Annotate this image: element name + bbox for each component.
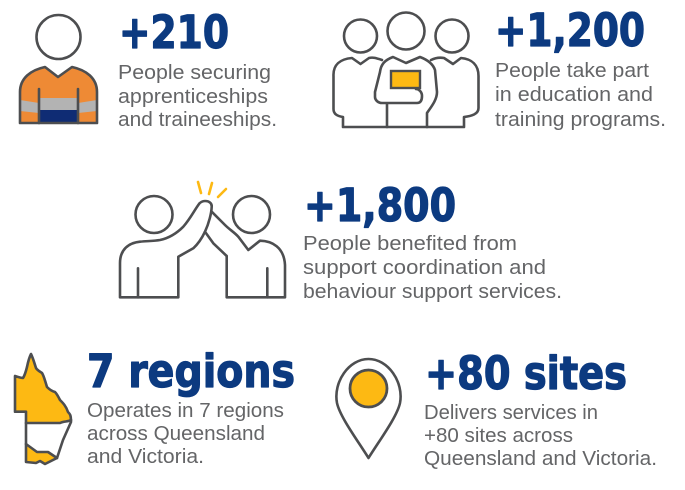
- text: education description: [495, 60, 666, 131]
- heading: +210: +210: [119, 6, 229, 59]
- text: apprenticeships description: apprenticeships: [118, 86, 268, 108]
- icon: worker in hi-vis shirt: [20, 15, 97, 123]
- icon: group of three people with tablet: [333, 12, 478, 127]
- text: education description: People take part: [495, 60, 649, 82]
- text: regions description: across Queensland: [87, 423, 265, 445]
- text: apprenticeships description: [118, 62, 277, 131]
- text: sites description: [424, 402, 657, 470]
- text: support services description: [303, 233, 562, 303]
- panel: sites stat: [336, 347, 657, 470]
- text: education description: in education and: [495, 84, 653, 106]
- heading: +80 sites: +80 sites: [425, 347, 627, 400]
- text: education description: training programs.: [495, 109, 666, 131]
- panel: regions stat: [15, 345, 295, 468]
- heading: +1,200: +1,200: [495, 4, 645, 57]
- text: sites description: +80 sites across: [424, 425, 573, 447]
- text: support services description: People benefited from: [303, 233, 517, 255]
- text: regions description: Operates in 7 regions: [87, 400, 284, 422]
- text: sites description: Delivers services in: [424, 402, 598, 424]
- heading: +1,800: +1,800: [304, 179, 456, 232]
- text: support services description: support coordination and: [303, 257, 546, 279]
- heading: 7 regions: 7 regions: [87, 345, 295, 398]
- text: support services description: behaviour support services.: [303, 281, 562, 303]
- text: regions description: and Victoria.: [87, 446, 204, 468]
- text: apprenticeships description: and traineeships.: [118, 109, 277, 131]
- panel: support services stat: [120, 179, 562, 303]
- text: regions description: [87, 400, 284, 468]
- text: sites description: Queensland and Victoria.: [424, 448, 657, 470]
- panel: apprenticeships stat: [20, 6, 277, 131]
- icon: two people high-fiving: [120, 182, 285, 297]
- panel: education stat: [333, 4, 666, 131]
- text: apprenticeships description: People securing: [118, 62, 271, 84]
- icon: map of Queensland and Victoria: [15, 354, 71, 464]
- icon: location pin: [336, 359, 401, 458]
